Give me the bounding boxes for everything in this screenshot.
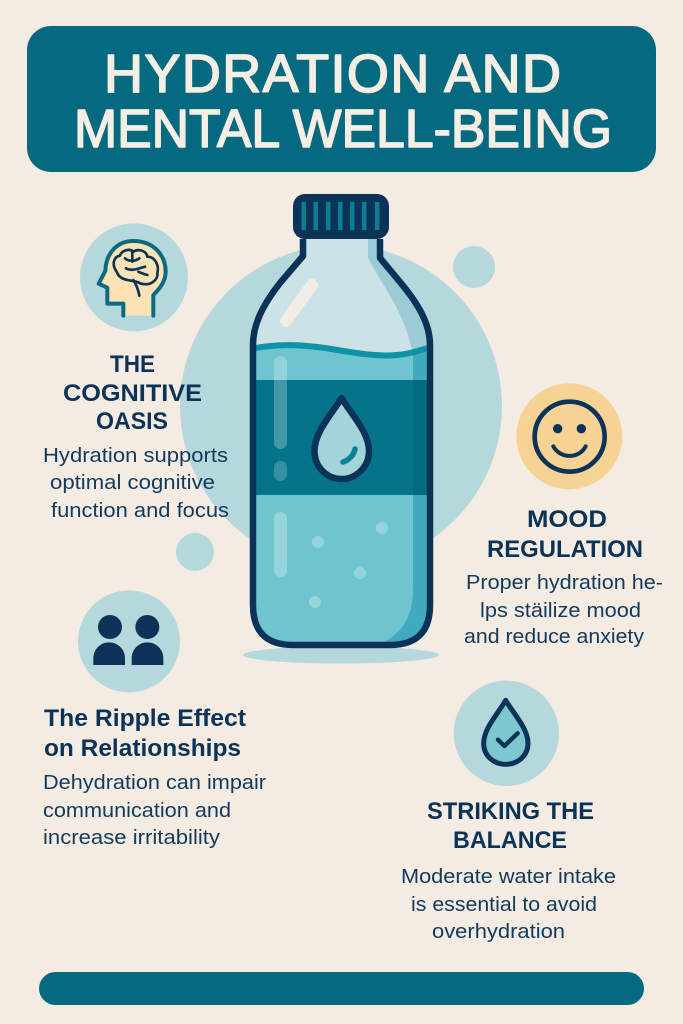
heading: OASIS [96,408,168,435]
heading: COGNITIVE [63,380,202,407]
bottle body contents [256,239,427,642]
body text [464,571,663,648]
heading: MOOD [527,506,607,533]
title text: MENTAL WELL-BEING [74,99,612,159]
body text: Dehydration can impair [43,771,266,794]
body text: increase irritability [43,826,221,849]
body text: Moderate water intake [401,865,616,888]
icon: head with brain [80,223,188,331]
heading: REGULATION [487,536,643,563]
title text: HYDRATION AND [104,44,561,104]
title text [74,44,612,159]
body text [43,771,266,849]
title banner [27,26,656,172]
body text: lps stäilize mood [480,599,641,622]
bottle outline [253,239,430,645]
panel: mood regulation [464,383,663,648]
panel: striking the balance [401,681,616,943]
heading [63,351,202,435]
small decorative bubble left [176,533,214,571]
bottle cap [293,194,389,239]
body text: overhydration [432,920,565,943]
body text: is essential to avoid [411,893,597,916]
heading [487,506,643,563]
water drop on label [314,398,369,479]
body text: and reduce anxiety [464,625,645,648]
water bottle illustration [243,194,439,664]
bottle shadow [243,646,439,664]
body text [43,444,229,522]
icon: smiling face [516,383,622,489]
bottle highlight [286,285,312,321]
body text [401,865,616,943]
heading: STRIKING THE [427,798,594,825]
body text: communication and [43,799,231,822]
heading: BALANCE [453,827,567,854]
bottom bar [39,972,644,1005]
background circle behind bottle [180,245,502,567]
body text: Hydration supports [43,444,228,467]
heading [44,705,246,762]
body text: optimal cognitive [50,471,215,494]
heading [427,798,594,854]
heading: THE [110,351,155,378]
body text: function and focus [51,499,229,522]
panel: the ripple effect on relationships [43,590,266,849]
heading: The Ripple Effect [44,705,246,732]
panel: the cognitive oasis [43,223,229,522]
icon: water drop with check [454,681,559,786]
heading: on Relationships [44,735,241,762]
small decorative bubble top right [453,246,495,288]
icon: two people [78,590,180,692]
body text: Proper hydration he- [466,571,663,594]
